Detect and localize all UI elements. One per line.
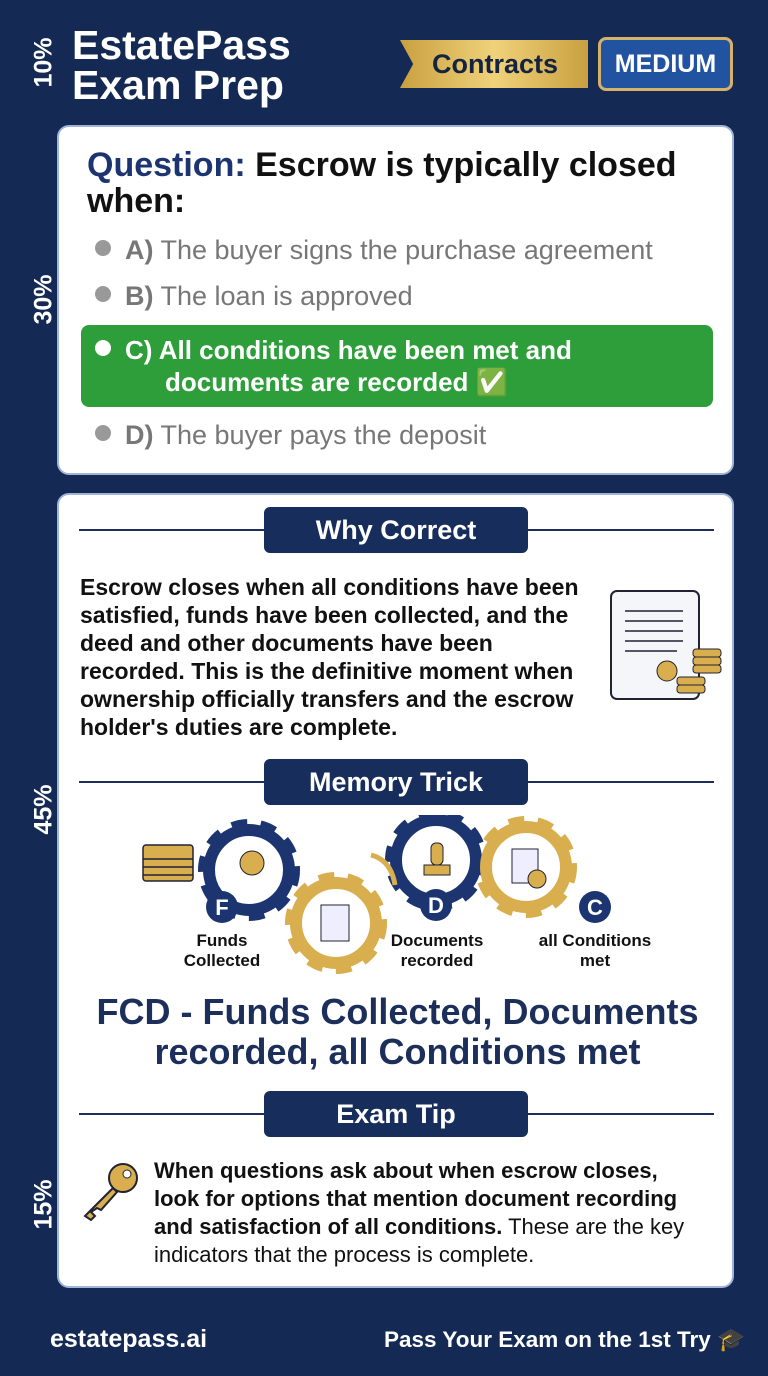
mnemonic: [96, 991, 699, 1072]
caption D: Documents: [391, 931, 483, 950]
footer right: Pass Your Exam on the 1st Try 🎓: [384, 1327, 745, 1352]
caption F: Collected: [184, 951, 260, 970]
side label 30%: 30%: [30, 274, 58, 325]
gears diagram: [142, 815, 611, 974]
title: EstatePass: [72, 22, 291, 68]
gears diagram: D: [428, 893, 444, 918]
caption C: met: [580, 951, 610, 970]
title: Exam Prep: [72, 62, 284, 108]
option B: B) The loan is approved: [125, 281, 413, 311]
icon: cash stack: [143, 845, 193, 881]
exam tip text: When questions ask about when escrow closes, look for options that mention document recording and satisfaction of all conditions. These are the key indicators that the process is complete.: [154, 1158, 684, 1267]
badge: Contracts: Contracts: [432, 49, 558, 79]
option C correct: C) All conditions have been met and: [125, 335, 572, 365]
panel: question: [57, 125, 734, 475]
title: [72, 22, 291, 108]
caption C: [539, 931, 651, 970]
caption F: Funds: [196, 931, 248, 950]
badge: MEDIUM: MEDIUM: [615, 50, 716, 78]
header: Memory Trick: Memory Trick: [309, 767, 483, 797]
side label 45%: 45%: [30, 784, 58, 835]
mnemonic: FCD - Funds Collected, Documents: [96, 991, 699, 1032]
why correct text: Escrow closes when all conditions have been satisfied, funds have been collected, and the deed and other documents have been recorded. This is the definitive moment when ownership officially transfers and the escrow holder's duties are complete.: [80, 574, 578, 740]
question text: Question: Escrow is typically closed when:: [87, 146, 677, 220]
footer left: estatepass.ai: [50, 1325, 207, 1353]
caption D: recorded: [401, 951, 473, 970]
option D: D) The buyer pays the deposit: [125, 420, 486, 450]
gears diagram: F: [215, 895, 229, 920]
badge: Contracts: [400, 40, 588, 88]
header: Why Correct: Why Correct: [316, 515, 476, 545]
option C correct: [81, 325, 713, 407]
header: Exam Tip: Exam Tip: [336, 1099, 456, 1129]
side label 10%: 10%: [30, 37, 58, 88]
caption D: [391, 931, 483, 970]
side label 15%: 15%: [30, 1179, 58, 1230]
badge: MEDIUM: [598, 37, 733, 91]
caption C: all Conditions: [539, 931, 651, 950]
option C correct: documents are recorded ✅: [165, 367, 508, 397]
icon: key: [84, 1163, 138, 1222]
option A: A) The buyer signs the purchase agreement: [125, 235, 653, 265]
panel: explanation: [57, 493, 734, 1288]
icon: deed and coins: [610, 590, 722, 700]
gears diagram: C: [587, 895, 603, 920]
caption F: [184, 931, 260, 970]
mnemonic: recorded, all Conditions met: [154, 1031, 641, 1072]
